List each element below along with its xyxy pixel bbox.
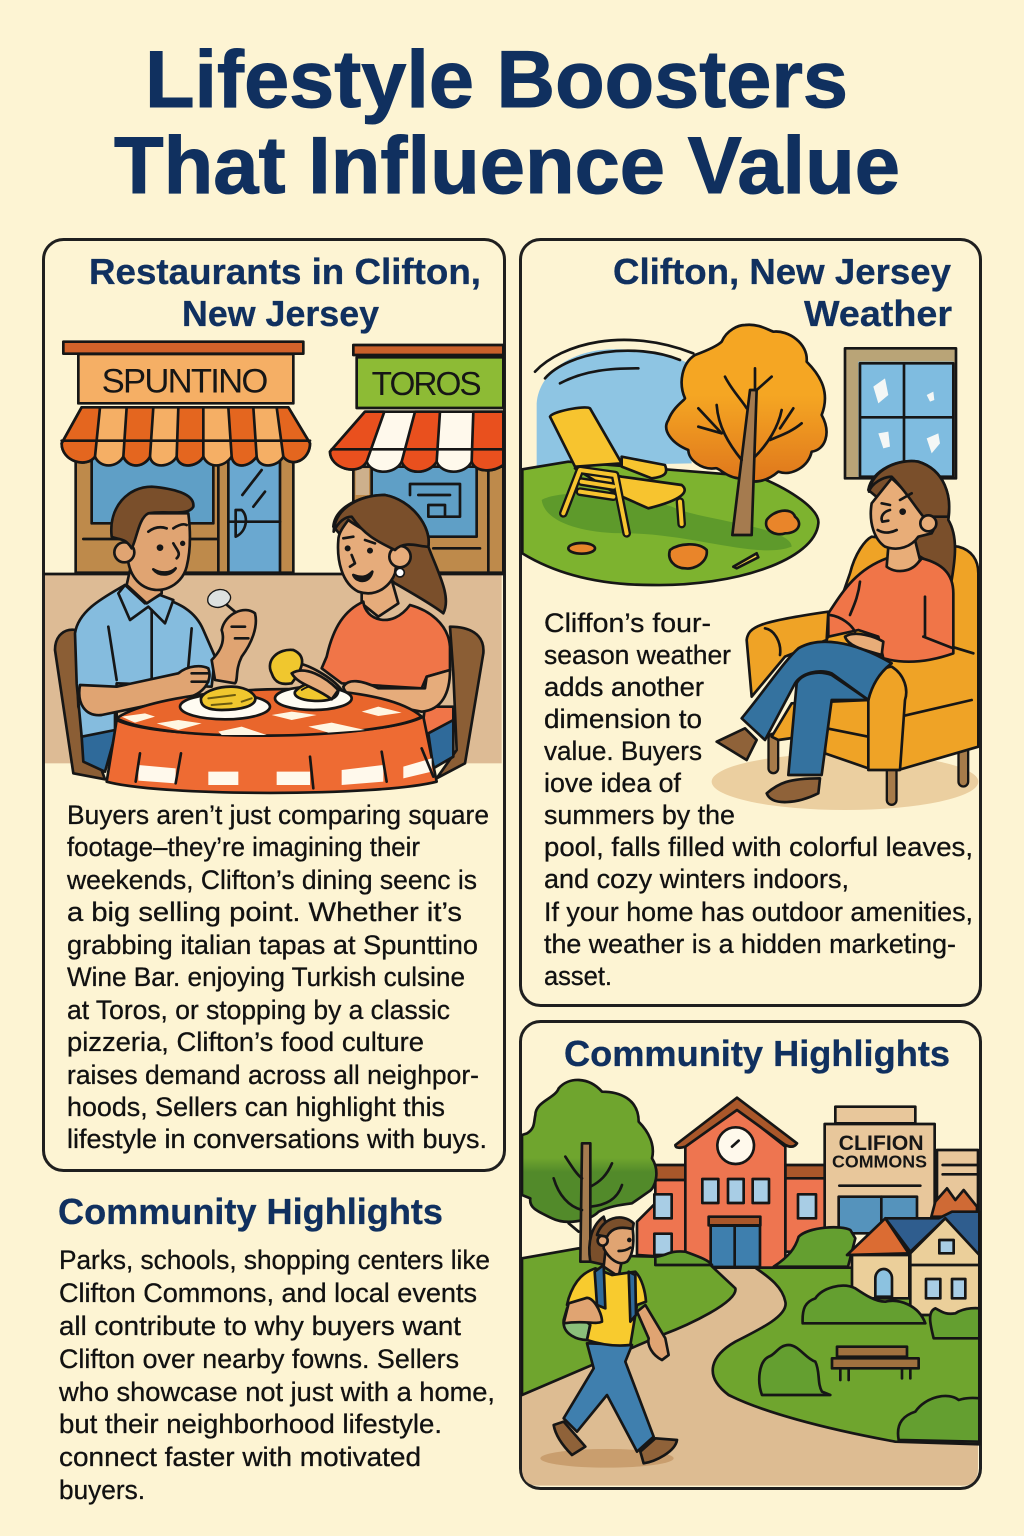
text block: restaurants: a big selling point. Whether it’s <box>67 897 462 927</box>
sky <box>537 349 692 467</box>
storefront: Toros <box>330 345 503 573</box>
text block: weather: and cozy winters indoors, <box>544 864 849 894</box>
shopping centre: CLIFION <box>839 1131 924 1155</box>
section: community highlights text <box>58 1191 495 1505</box>
woman <box>717 461 955 802</box>
text block: restaurants: at Toros, or stopping by a classic <box>67 995 450 1025</box>
fallen leaves <box>568 511 799 569</box>
text block: restaurants: lifestyle in conversations with buys. <box>67 1124 487 1154</box>
window <box>845 348 956 478</box>
armchair <box>747 537 978 800</box>
text block: weather: asset. <box>544 961 612 991</box>
text block: restaurants: raises demand across all neighpor- <box>67 1060 479 1090</box>
heading: community highlights: Community Highlights <box>58 1191 443 1232</box>
text block: weather: dimension to <box>544 704 702 734</box>
heading: weather <box>613 251 952 334</box>
autumn tree <box>666 325 826 535</box>
text block: restaurants: Buyers aren’t just comparing square <box>67 800 489 830</box>
text block: community: who showcase not just with a home, <box>58 1377 495 1407</box>
text block: community: connect faster with motivated <box>59 1442 421 1472</box>
text block: weather <box>544 608 973 991</box>
path <box>522 1262 978 1486</box>
man <box>75 487 256 772</box>
plates with food <box>180 682 352 719</box>
storefront: Spuntino <box>62 342 310 573</box>
text block: community: Clifton Commons, and local events <box>59 1278 477 1308</box>
houses <box>847 1212 979 1315</box>
text block: weather: iove idea of <box>544 768 682 798</box>
text block: community: Parks, schools, shopping centers like <box>59 1245 490 1275</box>
chairs <box>55 627 483 779</box>
title: That Influence Value <box>114 121 900 211</box>
heading: community panel: Community Highlights <box>564 1033 950 1074</box>
panel: restaurants <box>44 240 504 1170</box>
bench <box>832 1347 919 1380</box>
illustration: autumn yard and woman in armchair <box>522 325 978 810</box>
text block: weather: Cliffon’s four- <box>544 608 711 638</box>
awning: Toros <box>330 412 503 472</box>
title <box>114 35 900 211</box>
sign: Spuntino: SPUNTINO <box>102 362 268 400</box>
text block: community: buyers. <box>59 1475 145 1505</box>
text block: restaurants: footage–they’re imagining their <box>67 832 420 862</box>
school <box>637 1098 825 1268</box>
shopping centre: COMMONS <box>832 1152 927 1172</box>
text block: weather: value. Buyers <box>544 736 702 766</box>
heading: restaurants: Restaurants in Clifton, <box>89 251 481 292</box>
heading: restaurants <box>89 251 481 334</box>
shrubs <box>759 1286 979 1442</box>
left lawn <box>522 1248 735 1395</box>
text block: community: but their neighborhood lifestyle. <box>59 1409 442 1439</box>
title: Lifestyle Boosters <box>145 35 848 125</box>
text block: restaurants: pizzeria, Clifton’s food culture <box>67 1027 424 1057</box>
text block: weather: pool, falls filled with colorful leaves, <box>544 832 973 862</box>
illustration: town scene <box>522 1080 979 1486</box>
awning: Spuntino <box>62 407 310 465</box>
text block: restaurants: grabbing italian tapas at Spunttino <box>67 930 478 960</box>
panel: weather <box>520 240 980 1006</box>
heading: restaurants: New Jersey <box>182 293 379 334</box>
text block: community <box>58 1245 495 1505</box>
held food <box>270 650 302 684</box>
text block: weather: the weather is a hidden marketing- <box>544 929 956 959</box>
panel: community <box>520 1022 980 1488</box>
heading: weather: Weather <box>804 293 952 334</box>
right lawn <box>713 1268 979 1444</box>
woman <box>298 495 453 768</box>
big tree <box>522 1080 656 1262</box>
text block: community: Clifton over nearby fowns. Sellers <box>59 1344 459 1374</box>
walking person <box>540 1217 677 1468</box>
text block: community: all contribute to why buyers want <box>59 1311 462 1341</box>
hedges <box>655 1227 855 1267</box>
text block: restaurants: weekends, Clifton’s dining seenc is <box>66 865 477 895</box>
text block: restaurants: hoods, Sellers can highlight this <box>67 1092 445 1122</box>
illustration: restaurant scene <box>45 342 503 793</box>
tablecloth <box>107 689 437 793</box>
lounge chair <box>550 407 685 533</box>
floor shadow <box>712 753 978 810</box>
sign: Toros: TOROS <box>372 366 482 403</box>
text block: weather: If your home has outdoor amenities, <box>544 897 973 927</box>
woman's hand <box>292 671 338 699</box>
text block: weather: season weather <box>544 640 731 670</box>
lawn <box>522 462 818 585</box>
text block: restaurants <box>66 800 489 1154</box>
heading: weather: Clifton, New Jersey <box>613 251 951 292</box>
shopping centre <box>825 1107 978 1233</box>
text block: weather: summers by the <box>544 800 735 830</box>
text block: weather: adds another <box>544 672 704 702</box>
text block: restaurants: Wine Bar. enjoying Turkish culsine <box>67 962 465 992</box>
